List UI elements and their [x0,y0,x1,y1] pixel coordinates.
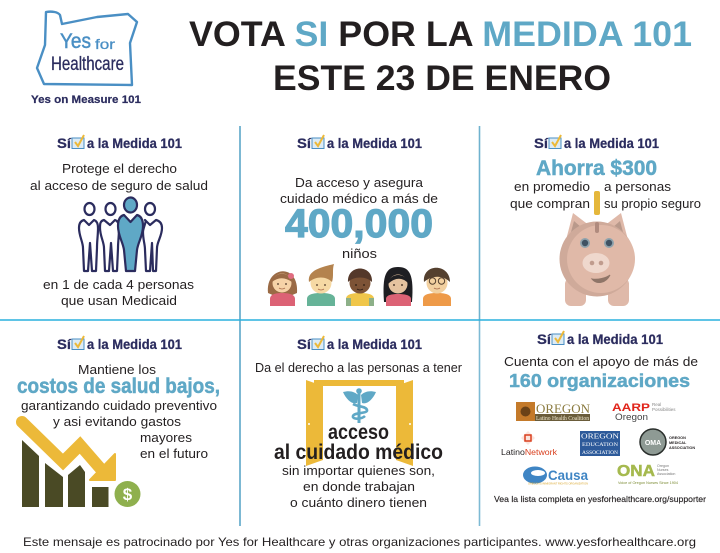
chart: descending bars with arrow: $ [123,485,133,504]
number: Ahorra $300: Ahorra $300 [536,157,657,180]
title: ESTE 23 DE ENERO [273,59,611,98]
icon: five children [268,264,451,306]
text: sin importar: o cuánto dinero tienen [290,495,427,510]
logo: Oregon Education Association: OREGON [581,432,620,440]
heading: Sí a la Medida 101: Sí [534,135,549,151]
text: garantizando: garantizando cuidado preventivo [21,398,217,413]
text: garantizando: y asi evitando gastos [53,414,182,429]
text: garantizando [21,398,217,461]
heading: Sí a la Medida 101: Sí [297,336,312,352]
text: protege: al acceso de seguro de salud [30,178,208,193]
text: cuenta con: Cuenta con el apoyo de más de [504,354,698,369]
panel: organizaciones [494,331,706,504]
icon: open doors [306,380,413,466]
text: sin importar: en donde trabajan [303,479,415,494]
text: mantiene los: Mantiene los [78,362,157,377]
text: sin importar: sin importar quienes son, [282,463,435,478]
heading: Sí a la Medida 101: a la Medida 101 [327,135,422,151]
panel: acceso al cuidado médico [255,336,463,510]
text: da acceso: Da acceso y asegura [295,175,424,190]
logo: Yes for Healthcare: Yes on Measure 101 [31,94,141,106]
logo: Oregon Latino Health Coalition: OREGON [536,401,591,416]
text: en promedio: en promedio [514,179,590,194]
logo: Oregon Medical Association: MEDICAL [669,441,687,445]
logo: Oregon Nurses Association: Association [657,472,675,476]
text: niños: niños [342,246,378,261]
panel: 400,000 niños [268,135,451,306]
title [189,15,692,98]
heading: Sí a la Medida 101: Sí [297,135,312,151]
logo: Latino Network [501,431,558,457]
logo: Oregon Nurses Association: Oregon [657,464,669,468]
number: 400,000: 400,000 [285,202,433,246]
logo: AARP Oregon: AARP [612,402,650,414]
icon: piggy bank [560,213,635,306]
logo: Oregon Medical Association: ASSOCIATION [669,446,695,450]
logo: Oregon Nurses Association [617,463,679,485]
heading: Sí a la Medida 101: a la Medida 101 [87,135,182,151]
logo: Latino Network: LatinoNetwork [501,447,558,457]
logo: Oregon Latino Health Coalition: Latino Health Coalition [536,415,590,422]
logo: AARP Oregon [612,402,676,422]
footer: Este mensaje es patrocinado por Yes for Healthcare y otras organizaciones participantes. www.yesforhealthcare.org [23,535,696,549]
text: lista completa: Vea la lista completa en yesforhealthcare.org/supporter [494,494,706,504]
text: da el derecho: Da el derecho a las personas a tener [255,360,463,375]
heading: Sí a la Medida 101: a la Medida 101 [564,135,659,151]
text: en promedio [510,179,701,211]
text: protege [30,161,208,193]
text: protege: Protege el derecho [62,161,177,176]
logo: Oregon Education Association: ASSOCIATION [582,450,618,456]
text: en promedio: a personas [604,179,672,194]
heading: Sí a la Medida 101: a la Medida 101 [327,336,422,352]
text: acceso al cuidado médico: acceso [328,420,389,444]
text: da acceso [280,175,438,206]
heading: Sí a la Medida 101: Sí [57,135,72,151]
logo: Yes for Healthcare: Healthcare [51,54,124,75]
logo: Yes for Healthcare: for [95,36,115,52]
number: 160 organizaciones: 160 organizaciones [509,370,690,391]
heading: Sí a la Medida 101: Sí [537,331,552,347]
panel: protege el derecho [30,135,208,308]
icon: caduceus [343,388,376,423]
text: garantizando: en el futuro [140,446,208,461]
text: en 1 de cada 4: que usan Medicaid [61,293,177,308]
icon: group of people [79,198,162,271]
logo: Oregon Nurses Association: Voice of Oregon Nurses Since 1904 [618,480,679,485]
logo: Oregon Medical Association: OREGON [669,436,686,440]
text: acceso al cuidado médico: al cuidado médico [274,440,443,464]
logo: AARP Oregon: Possibilities [652,407,676,412]
text: acceso al cuidado médico [274,420,443,464]
logo: Oregon Education Association: EDUCATION [582,442,618,448]
chart: descending bars with arrow [22,422,140,507]
panel: costos de salud [17,336,220,507]
text: en 1 de cada 4 [43,277,195,308]
logo: Yes for Healthcare [31,12,141,106]
heading: Sí a la Medida 101: Sí [57,336,72,352]
text: da acceso: cuidado médico a más de [280,191,438,206]
logo: AARP Oregon: Real [652,402,661,407]
logo: Oregon Latino Health Coalition [516,401,591,422]
icon: coin [594,191,600,215]
logo: Oregon Education Association [580,431,620,456]
text: sin importar [282,463,435,510]
logo: Oregon Medical Association [640,429,695,455]
logo: Oregon Nurses Association: Nurses [657,468,669,472]
text: en promedio: que compran [510,196,590,211]
text: costos de salud bajos: costos de salud bajos, [17,375,220,398]
logo: Oregon Medical Association: OMA [645,440,661,447]
logo: Causa: OREGON'S IMMIGRANT RIGHTS ORGANIZATION [528,482,588,486]
text: en promedio: su propio seguro [604,196,701,211]
panel: ahorra $300 [510,135,701,306]
heading: Sí a la Medida 101: a la Medida 101 [567,331,663,347]
heading: Sí a la Medida 101: a la Medida 101 [87,336,182,352]
logo: Causa: Causa [548,467,588,483]
title: VOTA SI POR LA MEDIDA 101 [189,15,692,54]
logo: AARP Oregon: Oregon [615,412,648,422]
text: en 1 de cada 4: en 1 de cada 4 personas [43,277,195,292]
logo: Yes for Healthcare: Yes [60,30,91,53]
logo: Causa [523,466,588,486]
text: garantizando: mayores [140,430,193,445]
logo: Oregon Nurses Association: ONA [617,463,655,480]
